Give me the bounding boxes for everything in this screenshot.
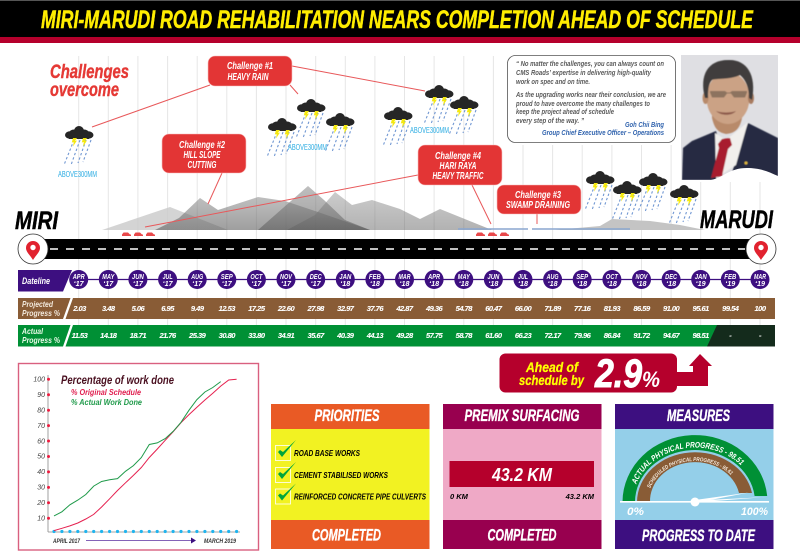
projected progress row: 37.76 xyxy=(367,304,384,313)
dateline row: OCT xyxy=(250,274,263,281)
gauge: ACTUAL PHYSICAL PROGRESS - 98.51 xyxy=(632,442,744,484)
projected progress row: 32.97 xyxy=(337,304,355,313)
dateline row: ‘18 xyxy=(488,281,499,288)
actual progress row: 35.67 xyxy=(308,331,325,340)
dateline row: ‘17 xyxy=(311,281,322,288)
premix heading: PREMIX SURFACING xyxy=(464,407,580,425)
dateline row: OCT xyxy=(606,274,618,281)
dateline row: ‘18 xyxy=(459,281,469,288)
dateline row: AUG xyxy=(546,274,559,281)
projected progress row: 12.53 xyxy=(219,304,236,313)
dateline row: NOV xyxy=(280,274,293,281)
callout: challenge 2: Challenge #2 xyxy=(179,140,225,151)
quote box: Group Chief Executive Officer – Operations xyxy=(542,130,664,137)
dateline row: MAY xyxy=(458,274,471,281)
connector lines xyxy=(92,66,537,227)
projected progress row: 71.89 xyxy=(544,304,562,313)
projected progress row: 3.48 xyxy=(102,304,116,313)
line chart: percentage of work done xyxy=(18,364,258,550)
label: Marudi: MARUDI xyxy=(700,206,774,234)
icon: cars xyxy=(122,232,509,236)
actual progress row: 11.53 xyxy=(72,331,89,340)
dateline row: JAN xyxy=(695,274,707,281)
dateline row: APR xyxy=(427,274,440,281)
projected progress row: 81.93 xyxy=(604,304,621,313)
callout: ahead of schedule xyxy=(500,352,712,396)
dateline row: ‘18 xyxy=(429,281,439,288)
actual progress row: 18.71 xyxy=(130,331,146,340)
scale start: 0 KM xyxy=(450,492,469,501)
dateline row: ‘18 xyxy=(548,281,558,288)
projected progress row: 91.00 xyxy=(663,304,681,313)
dateline row: FEB xyxy=(724,274,736,281)
actual progress row: 30.80 xyxy=(219,331,236,340)
callout: challenge 1: Challenge #1 xyxy=(227,61,273,72)
quote box: CMS Roads’ expertise in delivering high-quality xyxy=(516,70,652,77)
projected progress row: 54.78 xyxy=(456,304,473,313)
chart title: Percentage of work done xyxy=(61,375,174,387)
checklist: CEMENT STABILISED WORKS xyxy=(294,470,388,480)
projected progress row: 95.61 xyxy=(693,304,709,313)
gauge: SCHEDULED PHYSICAL PROGRESS - 95.61 xyxy=(647,457,734,488)
scale end: 43.2 KM xyxy=(565,492,595,501)
callout: ahead of schedule: schedule by xyxy=(519,372,585,388)
line chart: percentage of work done: 30 xyxy=(37,485,45,492)
projected progress row: 99.54 xyxy=(722,304,740,313)
hills xyxy=(102,186,705,230)
projected progress row: 6.95 xyxy=(161,304,175,313)
dateline row: MAR xyxy=(754,274,766,281)
gauge xyxy=(620,435,769,506)
dateline row: DEC xyxy=(665,274,678,281)
quote box: work on spec and on time. xyxy=(516,79,590,86)
dateline row: ‘18 xyxy=(666,281,676,288)
dateline row: ‘18 xyxy=(518,281,528,288)
rainfall labels: ABOVE300MM xyxy=(58,170,97,179)
dateline row: Dateline xyxy=(22,276,50,286)
x-axis start label: APRIL 2017 xyxy=(52,538,80,545)
quote box: every step of the way. ” xyxy=(516,118,584,125)
heading: challenges overcome: Challenges xyxy=(50,62,129,83)
callout: challenge 2: HILL SLOPE xyxy=(184,150,221,161)
callout: ahead of schedule: 2.9 xyxy=(594,352,643,396)
dateline row: SEP xyxy=(221,274,233,281)
priorities status: COMPLETED xyxy=(312,526,381,544)
dateline row: ‘17 xyxy=(192,281,203,288)
callout: challenge 4: HARI RAYA xyxy=(440,161,476,172)
projected progress row: 77.16 xyxy=(574,304,592,313)
actual progress row: 86.84 xyxy=(604,331,621,340)
panel: priorities xyxy=(271,404,430,549)
dateline row: ‘18 xyxy=(577,281,587,288)
line chart: percentage of work done: 70 xyxy=(37,423,45,430)
callout: challenge 4 xyxy=(418,145,502,185)
series: actual work done xyxy=(54,382,221,516)
actual progress row: 14.18 xyxy=(100,331,118,340)
projected progress row: Projected xyxy=(22,299,54,309)
line chart: percentage of work done: 40 xyxy=(37,469,45,476)
panel: measures xyxy=(615,404,774,549)
icon: storm clouds xyxy=(64,85,698,224)
actual progress row: - xyxy=(759,331,762,340)
gauge min label: 0% xyxy=(627,506,644,518)
dateline row: ‘17 xyxy=(133,281,144,288)
actual progress row: 34.91 xyxy=(278,331,294,340)
dateline row: JUL xyxy=(163,274,173,281)
projected progress row: 27.98 xyxy=(307,304,325,313)
checklist: REINFORCED CONCRETE PIPE CULVERTS xyxy=(294,492,426,502)
series: original schedule xyxy=(54,379,237,531)
dateline row: ‘17 xyxy=(222,281,233,288)
gauge max label: 100% xyxy=(741,506,768,518)
line chart: percentage of work done: 100 xyxy=(33,376,45,384)
dateline row: ‘18 xyxy=(400,281,410,288)
icon: Marudi pin xyxy=(746,234,776,264)
water lines: swamp xyxy=(458,228,630,230)
projected progress row: 17.25 xyxy=(248,304,266,313)
dateline row: JUL xyxy=(518,274,528,281)
actual progress row: 57.75 xyxy=(426,331,444,340)
projected progress row: 5.06 xyxy=(132,304,146,313)
callout: ahead of schedule: Ahead of xyxy=(525,359,579,375)
icon: Miri pin xyxy=(18,234,48,264)
quote box: As the upgrading works near their conclusion, we are xyxy=(515,92,666,99)
title banner xyxy=(0,0,800,43)
x-axis end label: MARCH 2019 xyxy=(204,538,236,545)
heading: challenges overcome: overcome xyxy=(50,80,119,101)
rainfall labels xyxy=(58,126,449,179)
progress bar xyxy=(450,461,594,487)
quote box: Goh Chii Bing xyxy=(625,122,665,129)
actual progress row: Actual xyxy=(21,326,44,336)
projected progress row: 42.87 xyxy=(395,304,414,313)
actual progress row xyxy=(18,325,775,346)
premix status: COMPLETED xyxy=(488,526,557,544)
arrow: time direction xyxy=(86,538,196,544)
actual progress row: 72.17 xyxy=(544,331,562,340)
projected progress row: 86.59 xyxy=(633,304,651,313)
line chart: percentage of work done: 20 xyxy=(36,500,45,507)
legend: actual work done: % Actual Work Done xyxy=(71,397,142,407)
dateline row: ‘18 xyxy=(607,281,617,288)
callout: challenge 4: HEAVY TRAFFIC xyxy=(432,171,484,182)
dateline row: ‘18 xyxy=(340,281,350,288)
actual progress row: 79.96 xyxy=(574,331,592,340)
rainfall labels: ABOVE300MM xyxy=(288,143,327,152)
dateline row: ‘17 xyxy=(281,281,292,288)
dateline row: JUN xyxy=(487,274,500,281)
dateline row: MAR xyxy=(398,274,410,281)
projected progress row: 49.36 xyxy=(425,304,444,313)
line chart: percentage of work done: 10 xyxy=(37,516,45,522)
callout: challenge 3: SWAMP DRAINING xyxy=(506,200,570,211)
callout: challenge 2 xyxy=(162,134,246,173)
line chart: percentage of work done: 60 xyxy=(37,438,45,445)
portrait xyxy=(681,55,778,182)
actual progress row: 94.67 xyxy=(663,331,681,340)
road xyxy=(42,239,754,259)
rainfall labels: ABOVE300MM xyxy=(410,126,449,135)
projected progress row: Progress % xyxy=(22,308,60,318)
dateline row: SEP xyxy=(576,274,588,281)
actual progress row: 33.80 xyxy=(248,331,266,340)
actual progress row: 98.51 xyxy=(693,331,709,340)
dateline row: ‘18 xyxy=(636,281,647,288)
actual progress row: 66.23 xyxy=(515,331,532,340)
callout: challenge 4: Challenge #4 xyxy=(435,151,481,162)
dateline row: DEC xyxy=(310,274,322,281)
actual progress row: 91.72 xyxy=(633,331,651,340)
dateline row xyxy=(18,270,770,292)
measures heading: MEASURES xyxy=(667,407,730,425)
actual progress row: Progress % xyxy=(22,335,60,345)
projected progress row: 60.47 xyxy=(485,304,503,313)
projected progress row: 100 xyxy=(754,304,767,313)
dateline row: ‘19 xyxy=(755,281,765,288)
legend: original schedule: % Original Schedule xyxy=(71,387,141,397)
priorities heading: PRIORITIES xyxy=(314,407,380,425)
projected progress row xyxy=(18,298,775,319)
projected progress row: 9.49 xyxy=(191,304,205,313)
callout: challenge 3 xyxy=(497,185,581,214)
dateline row: ‘19 xyxy=(725,281,735,288)
label: Miri: MIRI xyxy=(15,207,59,235)
actual progress row: 25.39 xyxy=(188,331,207,340)
dateline row: APR xyxy=(72,274,85,281)
dateline row: JAN xyxy=(339,274,352,281)
line chart: percentage of work done: 90 xyxy=(37,392,45,399)
dateline row: NOV xyxy=(636,274,649,281)
actual progress row: 44.13 xyxy=(366,331,384,340)
line chart: percentage of work done: 50 xyxy=(37,454,45,461)
actual progress row: 61.60 xyxy=(485,331,503,340)
quote box: keep the project ahead of schedule xyxy=(516,109,614,116)
dateline row: ‘19 xyxy=(696,281,706,288)
projected progress row: 66.00 xyxy=(515,304,532,313)
dateline row: AUG xyxy=(190,274,204,281)
callout: challenge 1: HEAVY RAIN xyxy=(228,72,269,83)
dateline row: ‘17 xyxy=(163,281,174,288)
dateline row: ‘18 xyxy=(370,281,380,288)
projected progress row: 22.60 xyxy=(277,304,295,313)
actual progress row: 49.28 xyxy=(395,331,414,340)
quote box xyxy=(508,56,676,142)
actual progress row: - xyxy=(729,331,732,340)
dateline row: ‘17 xyxy=(251,281,263,288)
dateline row: ‘17 xyxy=(103,281,114,288)
checklist: ROAD BASE WORKS xyxy=(294,448,360,458)
actual progress row: 21.76 xyxy=(158,331,177,340)
callout: challenge 2: CUTTING xyxy=(188,160,217,171)
projected progress row: 2.03 xyxy=(72,304,87,313)
line chart: percentage of work done: 80 xyxy=(37,407,45,414)
dateline row: FEB xyxy=(369,274,381,281)
progress bar: 43.2 KM xyxy=(491,465,553,485)
actual progress row: 58.78 xyxy=(456,331,473,340)
dateline row: MAY xyxy=(102,274,115,281)
callout: challenge 1 xyxy=(208,56,292,86)
quote box: “ No matter the challenges, you can always count on xyxy=(516,61,664,68)
callout: challenge 3: Challenge #3 xyxy=(515,190,561,201)
checklist xyxy=(276,440,426,504)
callout: ahead of schedule: % xyxy=(642,367,660,392)
dateline row: JUN xyxy=(132,274,145,281)
panel: premix surfacing xyxy=(443,404,602,549)
quote box: proud to have overcome the many challenges to xyxy=(515,101,651,108)
dateline row: ‘17 xyxy=(74,281,85,288)
actual progress row: 40.39 xyxy=(336,331,355,340)
